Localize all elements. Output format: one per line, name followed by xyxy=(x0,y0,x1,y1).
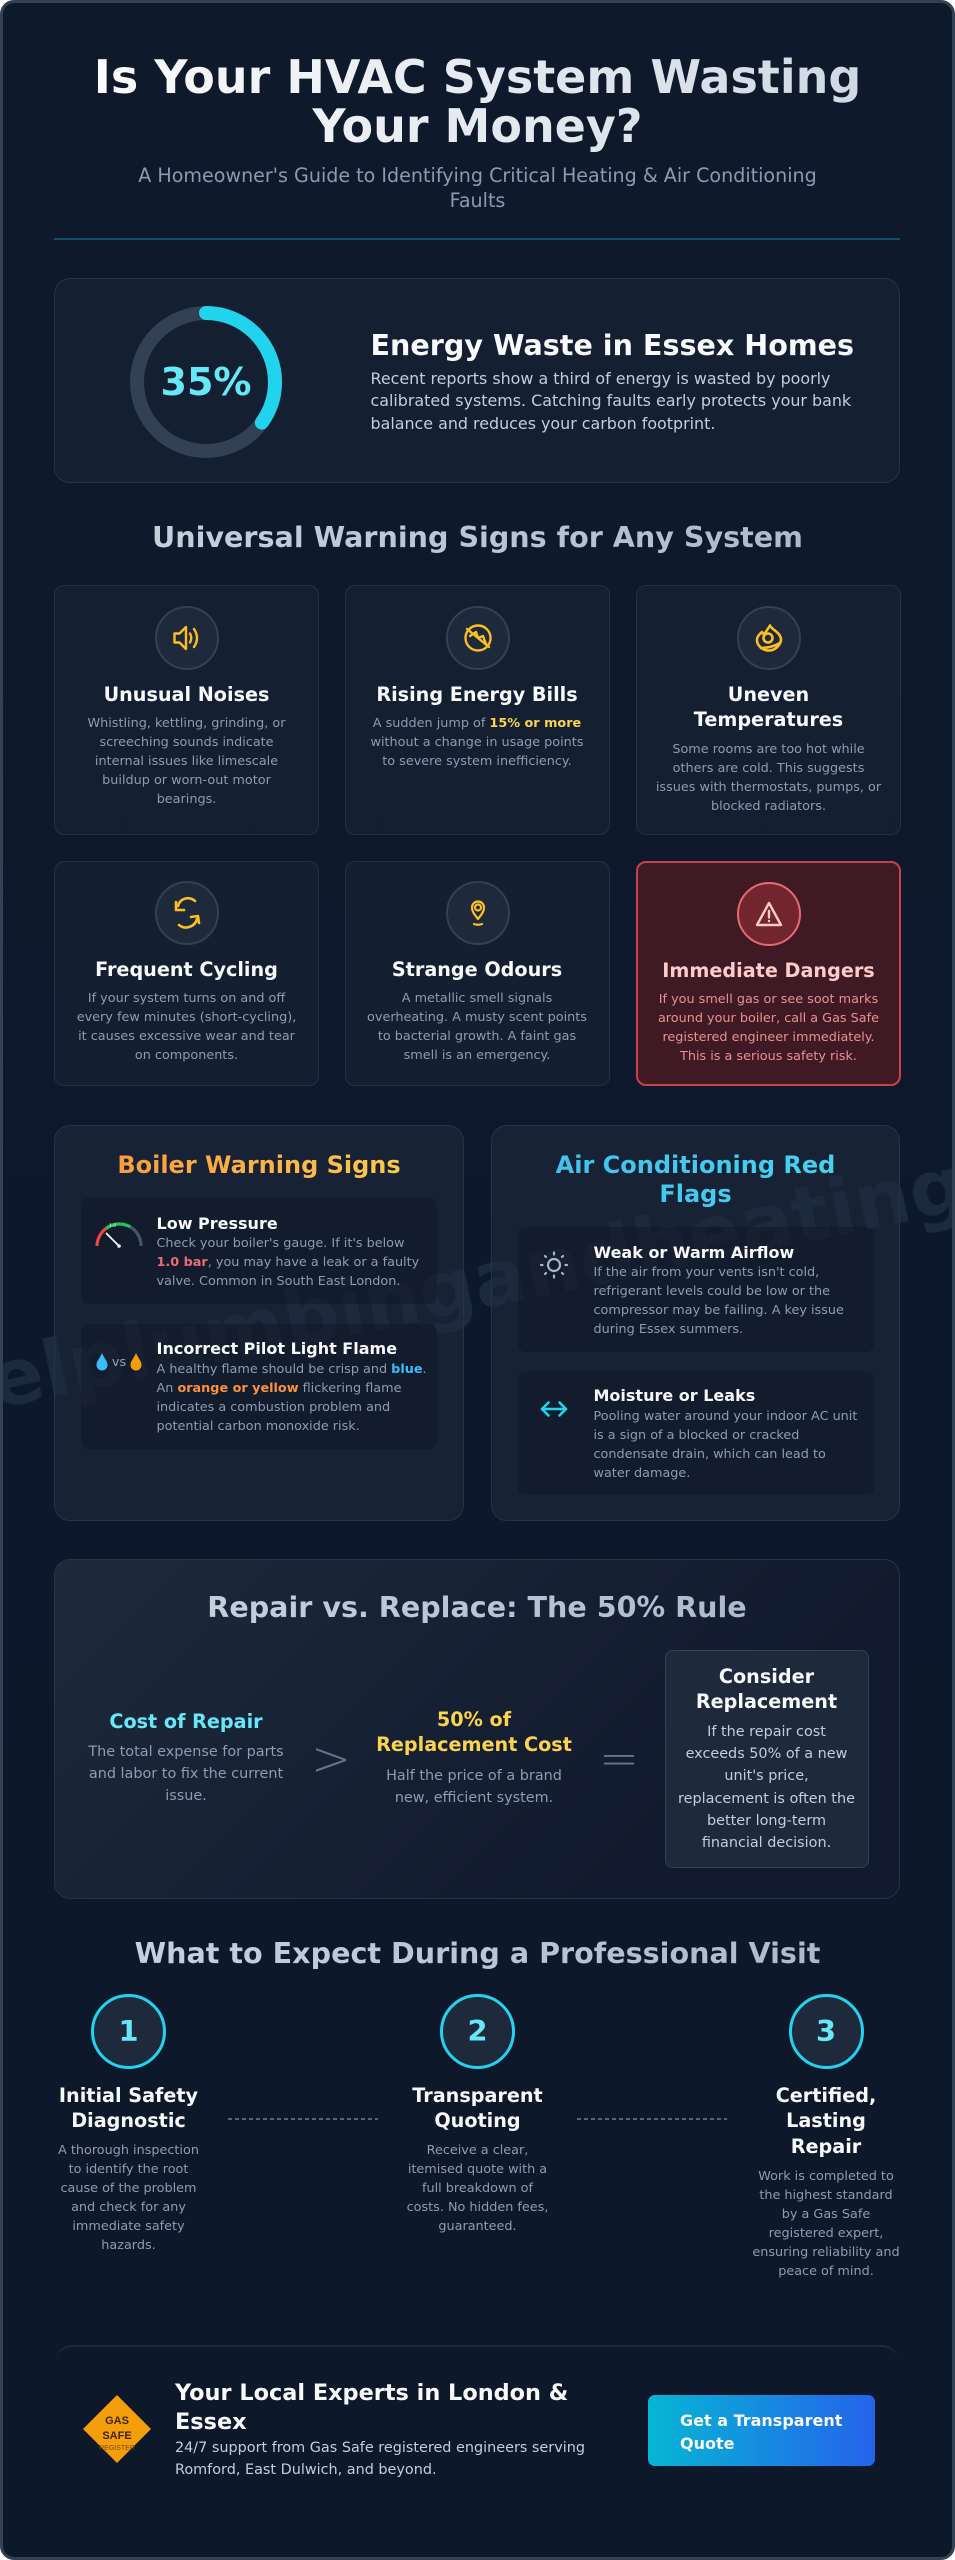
result title xyxy=(696,1665,837,1713)
item description: condensate drain, which can lead to xyxy=(594,1447,826,1462)
button label: Get a Transparent xyxy=(680,2410,842,2430)
card title: Strange Odours xyxy=(392,958,562,981)
step title: Transparent xyxy=(412,2084,543,2107)
icon: double arrow xyxy=(540,1401,568,1417)
footer panel xyxy=(56,2345,898,2510)
step title: Quoting xyxy=(434,2109,521,2132)
card description: A sudden jump of 15% or more xyxy=(373,716,581,731)
item: weak airflow xyxy=(518,1227,874,1352)
item: low pressure xyxy=(81,1198,437,1304)
step description: and check for any xyxy=(71,2200,186,2215)
step title xyxy=(412,2084,543,2132)
heading: universal warning signs: Universal Warning Signs for Any System xyxy=(152,520,803,554)
card description: smell is an emergency. xyxy=(404,1048,550,1063)
step description: costs. No hidden fees, xyxy=(407,2200,548,2215)
item description: 1.0 bar, you may have a leak or a faulty xyxy=(156,1255,419,1270)
item description: Pooling water around your indoor AC unit xyxy=(594,1408,857,1424)
card description: to severe system inefficiency. xyxy=(382,754,572,769)
step title: Repair xyxy=(791,2135,861,2158)
card description: screeching sounds indicate xyxy=(99,735,274,750)
step description: ensuring reliability and xyxy=(752,2245,900,2260)
icon: blue vs orange flame xyxy=(96,1353,142,1370)
heading: professional visit: What to Expect During a Professional Visit xyxy=(135,1936,820,1970)
connector: step 2 to 3 xyxy=(577,2118,727,2120)
step 1 xyxy=(58,1994,199,2253)
card description: Some rooms are too hot while xyxy=(672,742,865,756)
title: Your Money? xyxy=(312,99,643,153)
step description: registered expert, xyxy=(769,2226,883,2241)
button label xyxy=(680,2410,842,2452)
step number: 2 xyxy=(467,2014,488,2048)
icon: speaker xyxy=(155,606,219,670)
badge: gas safe: REGISTER xyxy=(99,2445,135,2452)
badge: gas safe: GAS xyxy=(105,2415,129,2427)
card: uneven temperatures xyxy=(636,585,901,835)
step number: 1 xyxy=(118,2014,139,2048)
heading: air conditioning: Air Conditioning Red xyxy=(556,1151,835,1179)
heading: universal warning signs xyxy=(0,519,955,555)
step description xyxy=(407,2143,548,2234)
connector: step 1 to 2 xyxy=(228,2118,378,2120)
icon: warning triangle xyxy=(736,882,800,946)
item description: during Essex summers. xyxy=(594,1322,743,1337)
step description: Work is completed to xyxy=(758,2168,894,2184)
card description: If your system turns on and off xyxy=(88,991,285,1006)
step description: Receive a clear, xyxy=(427,2143,528,2158)
card description xyxy=(656,742,882,814)
item description xyxy=(594,1264,844,1337)
result title: Consider xyxy=(719,1665,814,1688)
operator: greater than: > xyxy=(311,1731,351,1787)
card description: A metallic smell signals xyxy=(402,991,552,1006)
card description: bearings. xyxy=(157,792,216,807)
result description: unit's price, xyxy=(724,1768,809,1784)
item title: Weak or Warm Airflow xyxy=(594,1243,794,1262)
heading: boiler xyxy=(55,1151,463,1180)
result title: Replacement xyxy=(696,1690,837,1713)
card: frequent cycling xyxy=(54,860,319,1086)
card description: issues with thermostats, pumps, or xyxy=(656,780,881,795)
icon: crossed bolt xyxy=(446,606,510,670)
card description: others are cold. This suggests xyxy=(673,761,864,776)
card: rising energy bills xyxy=(344,585,610,835)
card: unusual noises xyxy=(54,585,319,835)
step title: Diagnostic xyxy=(71,2109,186,2132)
result description: better long-term xyxy=(707,1813,826,1829)
icon: blue vs orange flame: vs xyxy=(112,1355,126,1370)
donut chart: 35%: 35% xyxy=(160,360,251,404)
term description: new, efficient system. xyxy=(395,1790,553,1806)
heading: air conditioning xyxy=(492,1151,899,1209)
step description: by a Gas Safe xyxy=(782,2207,870,2222)
step 3 xyxy=(752,1994,900,2279)
item description: is a sign of a blocked or cracked xyxy=(594,1428,799,1443)
item description: If the air from your vents isn't cold, xyxy=(594,1264,819,1280)
step description: A thorough inspection xyxy=(58,2143,199,2158)
item description: valve. Common in South East London. xyxy=(156,1274,400,1289)
result box: consider replacement xyxy=(664,1650,868,1868)
icon: odour pin xyxy=(446,881,510,945)
card description: every few minutes (short-cycling), xyxy=(77,1010,296,1025)
card description: around your boiler, call a Gas Safe xyxy=(658,1011,879,1026)
result description: exceeds 50% of a new xyxy=(686,1746,847,1762)
step description: cause of the problem xyxy=(60,2181,197,2196)
button: get a transparent quote xyxy=(648,2394,875,2466)
step number: 3 xyxy=(816,2014,836,2048)
title: Is Your HVAC System Wasting xyxy=(94,50,861,104)
footer text xyxy=(175,2440,585,2478)
term title: 50% of xyxy=(437,1708,511,1731)
step description: to identify the root xyxy=(69,2162,188,2177)
card: strange odours xyxy=(344,860,610,1086)
panel: boiler warning signs xyxy=(54,1125,464,1521)
icon: cycle arrows xyxy=(155,881,219,945)
card title xyxy=(694,683,843,731)
heading: air conditioning: Flags xyxy=(659,1180,732,1208)
item description: indicates a combustion problem and xyxy=(156,1400,390,1415)
footer text: Romford, East Dulwich, and beyond. xyxy=(175,2462,437,2478)
term title: Cost of Repair xyxy=(109,1710,263,1733)
step description: immediate safety xyxy=(72,2219,185,2234)
card description: it causes excessive wear and tear xyxy=(78,1029,295,1044)
item title: Incorrect Pilot Light Flame xyxy=(156,1339,397,1358)
card title: Temperatures xyxy=(694,708,843,731)
term description: The total expense for parts xyxy=(88,1744,284,1760)
equation term: cost of repair xyxy=(88,1710,284,1804)
step description: hazards. xyxy=(101,2238,156,2253)
step description: itemised quote with a xyxy=(408,2162,547,2177)
footer heading: Essex xyxy=(175,2409,247,2435)
term title: Replacement Cost xyxy=(376,1733,572,1756)
title xyxy=(0,53,955,152)
step description: the highest standard xyxy=(759,2188,893,2203)
footer text: 24/7 support from Gas Safe registered engineers serving xyxy=(175,2440,585,2456)
term description: and labor to fix the current xyxy=(89,1766,283,1782)
donut chart: 35% xyxy=(130,306,282,458)
card description xyxy=(87,716,286,807)
card description xyxy=(371,716,583,769)
step description: guaranteed. xyxy=(438,2219,517,2234)
body text: energy waste: calibrated systems. Catching faults early protects your bank xyxy=(370,391,851,410)
result description xyxy=(678,1724,855,1851)
button label: Quote xyxy=(680,2434,734,2452)
step title xyxy=(776,2084,876,2158)
card description xyxy=(77,991,296,1063)
subtitle: A Homeowner's Guide to Identifying Critical Heating & Air Conditioning xyxy=(138,164,817,187)
item description xyxy=(156,1236,419,1289)
badge: gas safe: SAFE xyxy=(102,2430,132,2442)
step number xyxy=(440,1994,515,2069)
step number xyxy=(788,1994,864,2069)
icon: pressure gauge: 1.0 xyxy=(109,1223,116,1229)
icon: uneven heat xyxy=(737,606,801,670)
item description: compressor may be failing. A key issue xyxy=(594,1303,844,1318)
item title: Low Pressure xyxy=(156,1214,278,1233)
panel: repair vs replace xyxy=(54,1559,900,1899)
item description: Check your boiler's gauge. If it's below xyxy=(156,1236,404,1250)
term title xyxy=(376,1708,572,1756)
item description: A healthy flame should be crisp and blue. xyxy=(156,1362,427,1376)
item description xyxy=(156,1362,427,1434)
card description: registered engineer immediately. xyxy=(662,1030,875,1045)
footer heading: Your Local Experts in London & xyxy=(175,2380,568,2406)
card title: Uneven xyxy=(728,683,809,706)
step title: Lasting xyxy=(786,2109,866,2132)
step description xyxy=(58,2143,199,2253)
heading: energy waste: Energy Waste in Essex Homes xyxy=(370,328,854,362)
card title: Unusual Noises xyxy=(104,683,269,706)
heading: 50% rule xyxy=(55,1589,899,1625)
subtitle xyxy=(138,164,817,212)
item title: Moisture or Leaks xyxy=(594,1386,755,1405)
result description: If the repair cost xyxy=(707,1724,826,1740)
heading: 50% rule: Repair vs. Replace: The 50% Rule xyxy=(207,1590,747,1624)
card description: internal issues like limescale xyxy=(95,754,278,769)
result description: financial decision. xyxy=(702,1835,831,1851)
heading: professional visit xyxy=(0,1935,955,1971)
term description: Half the price of a brand xyxy=(386,1768,562,1784)
item: pilot light flame xyxy=(81,1324,437,1449)
item description: potential carbon monoxide risk. xyxy=(156,1419,360,1434)
item description: water damage. xyxy=(594,1466,690,1481)
card description: buildup or worn-out motor xyxy=(102,773,271,788)
term description xyxy=(88,1744,284,1804)
card description: Whistling, kettling, grinding, or xyxy=(87,716,286,731)
term description: issue. xyxy=(165,1788,207,1804)
footer heading xyxy=(174,2380,568,2435)
body text: energy waste xyxy=(370,369,851,433)
step description: peace of mind. xyxy=(778,2264,874,2279)
step number xyxy=(91,1994,166,2069)
step title: Initial Safety xyxy=(59,2084,198,2107)
card title: Immediate Dangers xyxy=(662,958,875,982)
step description xyxy=(752,2168,900,2279)
card description: If you smell gas or see soot marks xyxy=(659,992,878,1006)
card description: blocked radiators. xyxy=(711,799,826,814)
item description: An orange or yellow flickering flame xyxy=(156,1381,401,1396)
card: immediate dangers xyxy=(636,860,901,1086)
icon: sun fan xyxy=(540,1251,568,1279)
card title: Rising Energy Bills xyxy=(376,683,578,706)
card description: without a change in usage points xyxy=(371,735,583,750)
step description: full breakdown of xyxy=(422,2181,533,2196)
step title: Certified, xyxy=(776,2084,876,2107)
card description: to bacterial growth. A faint gas xyxy=(378,1029,576,1044)
icon: pressure gauge xyxy=(95,1222,143,1248)
panel: energy waste stat xyxy=(54,278,900,483)
step 2 xyxy=(407,1994,548,2234)
card title: Frequent Cycling xyxy=(95,958,278,981)
heading: boiler: Boiler Warning Signs xyxy=(117,1151,401,1179)
subtitle: Faults xyxy=(450,189,505,212)
card description: overheating. A musty scent points xyxy=(367,1010,587,1025)
item: moisture or leaks xyxy=(518,1371,874,1495)
operator: equals: = xyxy=(599,1731,639,1787)
step title xyxy=(59,2084,198,2132)
equation term: 50% of replacement cost xyxy=(376,1708,572,1806)
body text: energy waste: balance and reduces your carbon footprint. xyxy=(370,414,715,433)
card description: This is a serious safety risk. xyxy=(680,1049,857,1064)
panel: air conditioning red flags xyxy=(491,1125,900,1521)
result description: replacement is often the xyxy=(678,1791,855,1807)
item description: refrigerant levels could be low or the xyxy=(594,1284,830,1299)
term description xyxy=(386,1768,562,1806)
card description xyxy=(658,992,879,1064)
card description: on components. xyxy=(135,1048,238,1063)
item description xyxy=(594,1408,858,1481)
badge: gas safe xyxy=(83,2395,151,2463)
card description xyxy=(367,991,587,1063)
body text: energy waste: Recent reports show a third of energy is wasted by poorly xyxy=(370,369,830,388)
